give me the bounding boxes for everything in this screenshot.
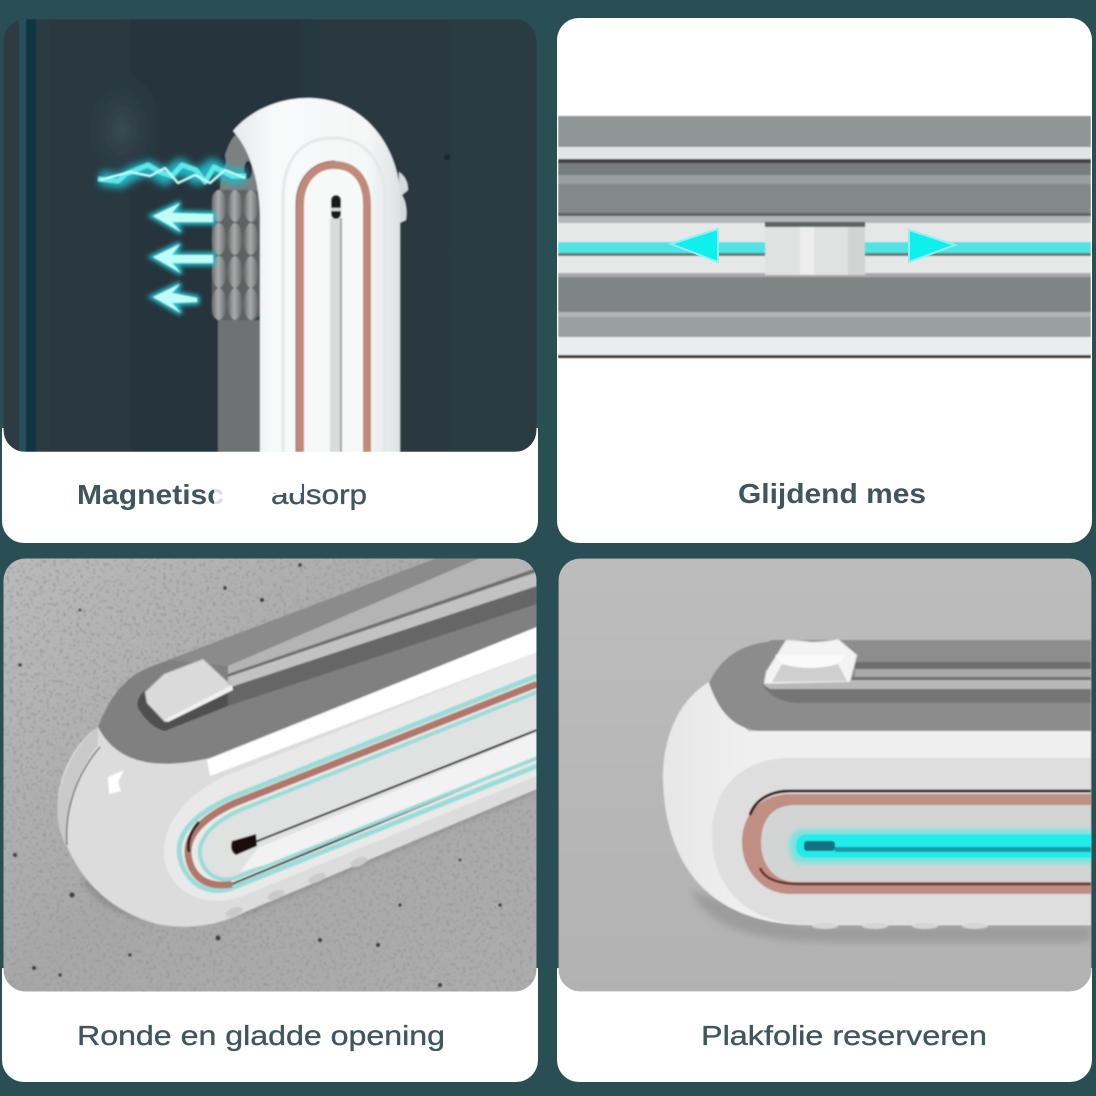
gray top band — [709, 641, 1091, 731]
rose gold ring — [742, 794, 1091, 894]
cyan glow — [789, 829, 1096, 864]
caption: sliding blade: Glijdend mes — [738, 478, 926, 509]
side clips — [398, 172, 408, 224]
caption: round smooth opening: Ronde en gladde opening — [77, 1020, 445, 1051]
recessed panel — [712, 758, 1091, 924]
photo: rail seen from above — [558, 116, 1091, 358]
icon: electric arc — [98, 165, 246, 183]
gray top band — [98, 604, 536, 764]
panel: cling film reserve — [557, 558, 1096, 1082]
white body — [663, 682, 1091, 925]
panel: round smooth opening — [2, 558, 538, 1082]
photo: device at an angle on concrete — [3, 558, 537, 992]
caption card 2 — [557, 18, 1092, 543]
icon: arrows pointing to the door — [153, 203, 213, 313]
photo: device head-on — [558, 558, 1096, 992]
gray back of device — [218, 320, 260, 452]
trim rings — [179, 676, 537, 891]
slot — [330, 218, 342, 452]
caption card 3 — [2, 968, 538, 1082]
magnet bumps — [212, 190, 260, 320]
caption: magnetic adsorption: adsorp — [271, 479, 367, 510]
white body — [233, 98, 400, 452]
highlight — [108, 770, 124, 794]
caption card 1 — [2, 428, 538, 543]
white top strip — [207, 627, 537, 776]
icon: arrow right — [909, 230, 955, 262]
slot — [804, 841, 835, 851]
icon: arrow left — [671, 229, 718, 262]
rail stripes — [170, 558, 480, 666]
ground shadow — [82, 790, 536, 920]
caption: magnetic adsorption — [77, 478, 367, 514]
panel: sliding blade — [557, 18, 1092, 543]
recessed panel — [164, 652, 537, 901]
bumps — [224, 855, 369, 919]
slider switch — [145, 659, 232, 722]
device body — [57, 660, 536, 928]
rose gold ring — [300, 165, 367, 452]
cyan track — [558, 242, 1091, 253]
slider blade — [765, 222, 865, 275]
caption: cling film reserve: Plakfolie reserveren — [701, 1020, 987, 1051]
concrete specks — [13, 563, 502, 987]
slider switch — [764, 639, 857, 684]
caption card 4 — [557, 968, 1092, 1082]
slot — [231, 834, 257, 855]
bumps — [812, 923, 988, 929]
panel: magnetic adsorption — [2, 19, 538, 543]
caption: magnetic adsorption: Magnetisc — [77, 479, 224, 510]
device shadow — [690, 890, 1091, 942]
photo: device on dark door — [3, 19, 537, 452]
